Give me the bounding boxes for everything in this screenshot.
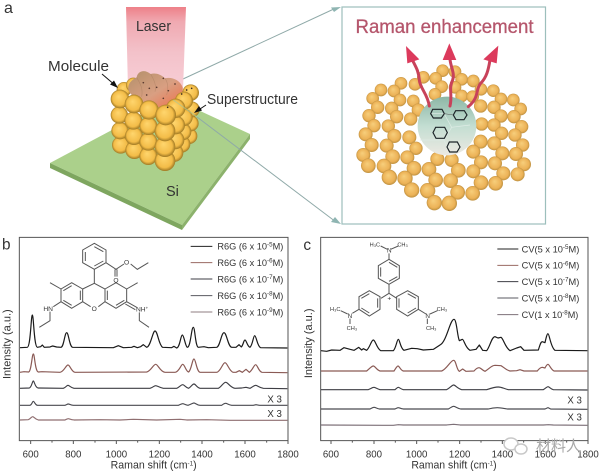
legend: M) [568,310,578,320]
legend: R6G (6 x 10 [217,291,268,301]
x tick labels: 1600 [234,449,256,460]
multiplier labels: X 3 [267,394,282,405]
panel: Raman enhancement inset [342,7,546,224]
x tick labels [323,449,599,460]
legend: M) [569,261,579,271]
R6G molecule structure: + [146,305,149,310]
superstructure: gold sphere cube [111,71,200,171]
x tick labels [23,449,299,460]
label: superstructure: Superstructure [207,92,298,108]
y axis title: Intensity (a.u.) [303,308,315,378]
crystal violet molecule structure [330,243,447,332]
legend: -8 [562,310,568,317]
crystal violet molecule structure: N [387,248,392,255]
x tick labels: 800 [366,449,382,460]
inset heading: Raman enhancement [356,16,534,38]
label: laser: Laser [136,19,171,35]
legend: M) [569,293,579,303]
legend: -5 [267,241,273,248]
panel: chart b [2,236,299,472]
crystal violet molecule structure: CH₃ [347,326,357,332]
x tick labels: 1400 [492,449,513,460]
x tick labels: 1000 [406,449,427,460]
spectra [20,315,287,420]
R6G molecule structure [39,243,149,327]
x tick labels: 1400 [191,449,213,460]
x tick labels: 1800 [577,449,599,460]
central sphere with molecules [418,97,476,155]
R6G molecule structure: O [113,278,119,285]
x tick labels: 1000 [106,449,127,460]
legend: M) [273,258,283,268]
panel label b: b [2,236,11,253]
R6G molecule structure: NH [136,306,146,313]
x axis title: ) [493,460,497,472]
legend: M) [273,274,283,284]
panel: silicon substrate [50,98,250,230]
watermark: 材料人 [536,438,581,455]
crystal violet molecule structure: N [348,313,353,320]
legend: -8 [563,293,569,300]
x axis title: -1 [488,460,494,467]
R6G molecule structure: HN [43,306,53,313]
multiplier labels: X 3 [567,395,582,406]
connector line: top to inset [183,7,341,79]
legend: CV(5 x 10 [522,261,563,271]
axes frame [321,237,588,444]
x tick labels: 800 [65,449,81,460]
x axis title: Raman shift (cm [411,460,489,472]
connector line: bottom to inset [197,117,341,224]
red Raman arrows [406,43,498,107]
legend: CV(5 x 10 [522,244,563,254]
legend [497,244,579,320]
x axis title: Raman shift (cm [111,460,188,472]
legend [191,241,283,317]
legend: -7 [563,277,569,284]
y axis title: Intensity (a.u.) [2,309,14,379]
crystal violet molecule structure: H₃C [370,243,380,249]
multiplier labels [567,395,582,424]
crystal violet molecule structure: CH₃ [426,326,436,332]
legend: R6G (6 x 10 [217,258,268,268]
laser beam [126,7,186,90]
x tick labels: 1800 [277,449,299,460]
legend: CV(5 x 10 [522,277,563,287]
x tick labels: 1200 [149,449,170,460]
multiplier labels: X 3 [567,413,582,424]
gold nanoparticle film [356,64,531,211]
multiplier labels [267,394,282,420]
R6G molecule structure: O [92,306,97,313]
legend: R6G (6 x 10 [217,274,268,284]
legend: -8 [267,291,273,298]
legend: M) [273,291,283,301]
legend: -7 [267,274,273,281]
legend: M) [273,242,283,252]
legend: R6G (6 x 10 [217,307,268,317]
legend: CV(1 x 10 [522,310,563,320]
legend: -6 [267,258,273,265]
label: molecule: Molecule [48,59,109,75]
legend: M) [569,244,579,254]
spectra [321,319,587,425]
multiplier labels: X 3 [267,409,282,420]
panel label c: c [303,237,311,254]
legend: M) [273,307,283,317]
x tick labels: 600 [323,449,339,460]
crystal violet molecule structure: CH₃ [397,243,408,249]
molecules on spheres [167,87,192,108]
label: superstructure [194,92,298,113]
axes frame [19,237,288,444]
crystal violet molecule structure: CH₃ [437,307,447,313]
watermark [504,438,581,455]
x tick labels: 1200 [449,449,470,460]
crystal violet molecule structure: + [387,296,391,303]
panel: a label: a [4,0,13,17]
crystal violet molecule structure: H₃C [330,307,340,313]
x tick labels: 1600 [535,449,556,460]
panel: chart c [303,237,599,472]
label: Si: Si [166,184,179,200]
x axis title: ) [193,460,197,472]
molecule cloud [128,71,183,107]
legend: R6G (6 x 10 [217,242,268,252]
legend: -6 [563,260,569,267]
crystal violet molecule structure: N [425,313,430,320]
legend: CV(5 x 10 [522,293,563,303]
x tick labels: 600 [23,449,39,460]
R6G molecule structure: O [124,260,129,267]
legend: -5 [563,244,569,251]
legend: -9 [267,307,273,314]
legend: M) [569,277,579,287]
x axis title: -1 [188,460,194,467]
label: molecule [48,59,118,88]
top row spheres [111,84,199,125]
